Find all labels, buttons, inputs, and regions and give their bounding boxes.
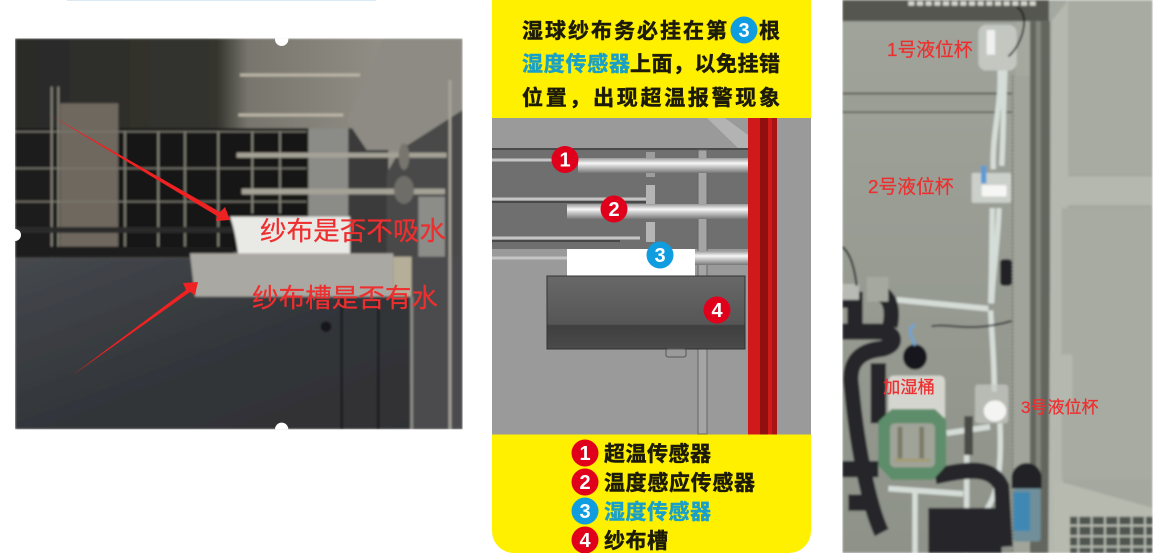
legend: 3 xyxy=(579,501,591,523)
heading text: 湿度传感器 xyxy=(522,52,630,76)
photo: chamber interior xyxy=(9,33,463,436)
level cups xyxy=(978,25,1017,71)
water trough xyxy=(547,276,745,349)
label: cup 1: 1号液位杯 xyxy=(887,39,973,60)
diagram: sensors and trough: 1 xyxy=(559,150,571,172)
heading text xyxy=(522,16,780,110)
arrow: to trough xyxy=(70,282,198,377)
heading text: 位置，出现超温报警现象 xyxy=(522,86,780,110)
heading text: 上面，以免挂错 xyxy=(630,53,780,76)
heading text: 湿球纱布务必挂在第 xyxy=(522,20,727,43)
water tubes xyxy=(888,71,1005,553)
panel: sensor diagram card xyxy=(492,0,811,553)
arrow: to gauze xyxy=(50,115,230,221)
diagram: sensors and trough: 2 xyxy=(608,199,620,221)
legend xyxy=(572,440,755,553)
panel: photo of gauze and trough xyxy=(9,33,463,436)
legend: 纱布槽 xyxy=(604,530,668,553)
number badges xyxy=(552,146,578,173)
legend: 4 xyxy=(579,530,591,552)
sensor rods xyxy=(578,158,748,173)
humidifier tank xyxy=(888,376,945,422)
water filter xyxy=(1012,463,1042,489)
label: gauze not absorbing: 纱布是否不吸水 xyxy=(260,216,446,246)
diagram: sensors and trough xyxy=(492,118,811,434)
legend: 1 xyxy=(579,443,591,465)
heading text: 根 xyxy=(759,20,780,43)
label: water in trough: 纱布槽是否有水 xyxy=(252,283,438,313)
diagram: sensors and trough: 4 xyxy=(711,300,723,322)
legend: 湿度传感器 xyxy=(604,500,711,524)
black insulation pipes xyxy=(842,292,1005,547)
diagram: sensors and trough: 3 xyxy=(654,245,666,267)
legend: 超温传感器 xyxy=(604,442,711,466)
label: cup 3: 3号液位杯 xyxy=(1021,398,1098,417)
legend: 2 xyxy=(579,472,591,494)
panel: photo of level cups xyxy=(842,0,1153,553)
label: humidifier tank: 加湿桶 xyxy=(883,377,935,397)
top sliver of cropped pale blue bar xyxy=(67,0,376,1)
legend: 温度感应传感器 xyxy=(604,471,755,495)
heading text: 3 xyxy=(738,20,750,42)
photo: cabinet interior xyxy=(842,0,1153,553)
gauge xyxy=(903,344,927,370)
label: cup 2: 2号液位杯 xyxy=(868,176,954,197)
red wall xyxy=(748,118,772,434)
corner notches xyxy=(275,38,288,46)
yellow card background xyxy=(492,0,811,553)
white gauze xyxy=(567,249,695,276)
